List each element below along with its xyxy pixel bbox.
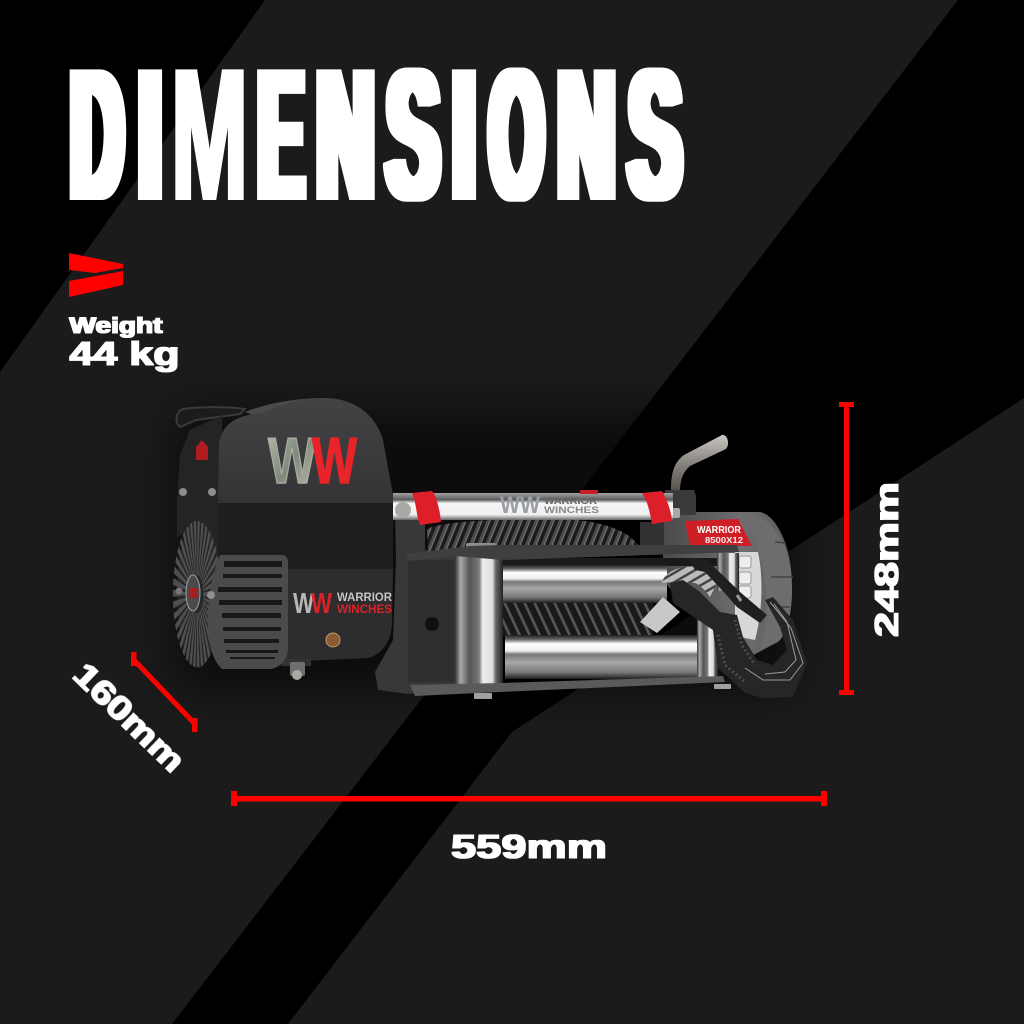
title: DIMENSIONS: I — [452, 32, 476, 238]
title: DIMENSIONS — [71, 31, 681, 238]
logo: Warrior Winches on motor: WARRIOR — [337, 592, 393, 604]
logo on tie bar: WW — [500, 492, 540, 519]
dimension line: height — [839, 402, 854, 695]
drum surround right — [640, 522, 664, 552]
cover dark band — [218, 503, 393, 569]
weight label: 44 kg — [70, 335, 180, 372]
lower motor box — [280, 569, 393, 662]
title: DIMENSIONS: E — [259, 33, 303, 238]
winch frame left plate — [375, 505, 500, 694]
fairlead top bar — [407, 545, 739, 561]
gearbox red label — [685, 519, 752, 546]
title: DIMENSIONS: O — [490, 32, 543, 238]
logo on tie bar: WINCHES — [544, 505, 599, 515]
cable drum upper — [427, 519, 640, 552]
title: DIMENSIONS: S — [629, 33, 681, 238]
icon: red chevron weight mark — [69, 253, 123, 297]
rope sleeve — [640, 597, 680, 633]
dimension line: depth — [131, 652, 198, 732]
left vertical roller — [455, 543, 503, 684]
title: DIMENSIONS: M — [171, 31, 248, 237]
title: DIMENSIONS: D — [71, 31, 123, 237]
dimension line: length — [231, 791, 827, 806]
rope twist — [662, 567, 717, 597]
winch illustration — [176, 398, 807, 699]
weight label — [70, 313, 180, 372]
motor terminal bolt — [281, 659, 311, 680]
icon: side screws — [179, 488, 216, 496]
logo on tie bar — [500, 492, 599, 519]
logo: Warrior Winches on motor — [293, 588, 393, 620]
tie bar — [393, 493, 673, 520]
mounting hole — [425, 617, 439, 631]
label: 160mm: 160mm — [66, 655, 193, 779]
gearbox red label: WARRIOR — [697, 525, 742, 536]
motor cover — [218, 398, 393, 503]
dark gap behind rollers — [503, 558, 718, 566]
clutch lever — [664, 435, 728, 518]
fairlead bottom bar — [410, 676, 725, 696]
red clamp left — [412, 491, 441, 525]
red clamp right — [642, 491, 672, 524]
title: DIMENSIONS: N — [558, 33, 615, 238]
bolt at bar end — [395, 502, 411, 518]
logo: WW on cover: W — [268, 424, 317, 497]
icon: red warning tag — [196, 440, 208, 460]
logo: WW on cover — [268, 424, 357, 497]
logo: Warrior Winches on motor: W — [311, 588, 332, 620]
logo: Warrior Winches on motor: WINCHES — [337, 604, 392, 616]
bottom bolts — [474, 684, 731, 699]
frame plate panel — [408, 560, 454, 682]
small red clip — [580, 490, 598, 494]
right vertical roller — [697, 553, 739, 678]
motor grille — [207, 555, 288, 669]
gearbox housing — [663, 512, 793, 662]
strap handle — [176, 398, 325, 427]
cable drum lower — [503, 603, 653, 636]
upper horizontal roller — [502, 565, 667, 603]
gearbox red label: 8500X12 — [705, 535, 743, 545]
label: 559mm: 559mm — [451, 828, 607, 865]
title: DIMENSIONS: N — [317, 33, 374, 238]
lower horizontal roller — [505, 635, 698, 679]
motor side plate — [177, 416, 222, 565]
logo: WW on cover: W — [312, 424, 357, 497]
weight label: Weight — [70, 313, 163, 338]
shackle and hook — [670, 558, 807, 698]
label: 248mm: 248mm — [868, 482, 905, 637]
logo on tie bar: WARRIOR — [544, 496, 598, 506]
logo: Warrior Winches on motor: W — [293, 588, 314, 620]
title: DIMENSIONS: S — [387, 33, 439, 238]
title: DIMENSIONS: I — [138, 32, 162, 238]
brass bolt — [326, 633, 340, 647]
cooling fan — [176, 520, 219, 668]
